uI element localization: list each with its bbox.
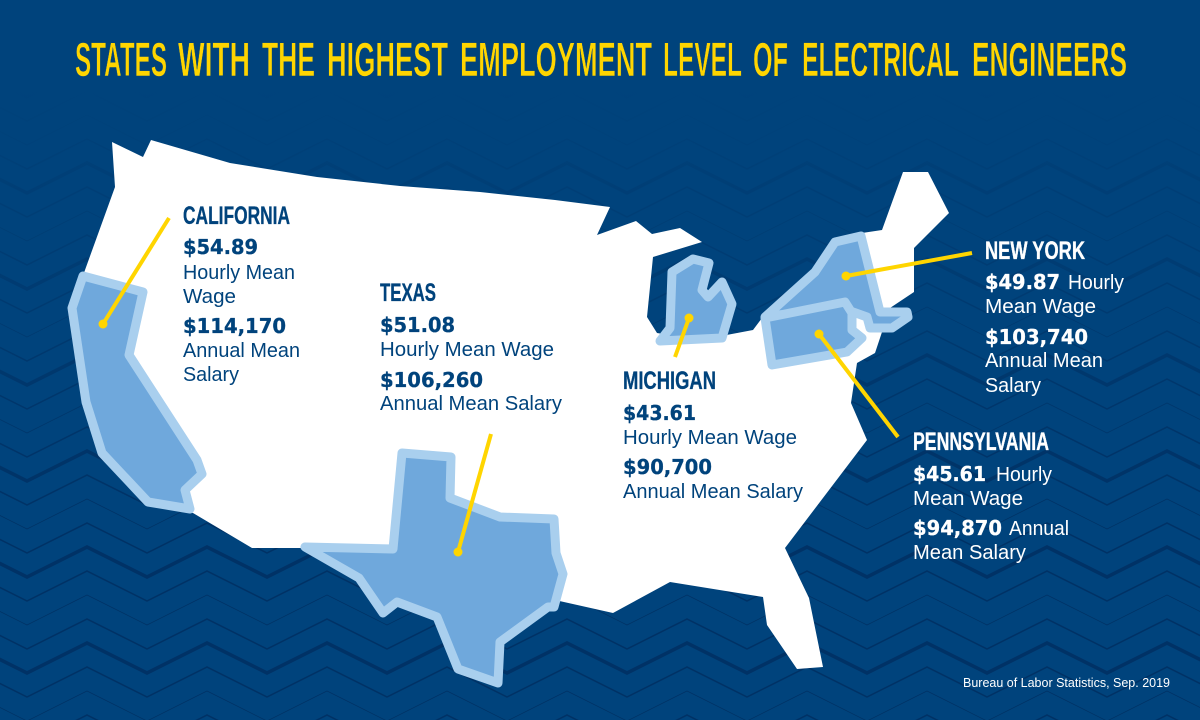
Pennsylvania text: Annual bbox=[1009, 518, 1069, 540]
panel: Texas bbox=[305, 279, 563, 683]
US map silhouette bbox=[72, 140, 949, 669]
title: THE bbox=[262, 34, 315, 87]
Texas text: Annual Mean Salary bbox=[380, 393, 562, 415]
title: ELECTRICAL bbox=[802, 34, 959, 87]
title: STATES bbox=[75, 34, 167, 87]
title: EMPLOYMENT bbox=[460, 34, 652, 87]
New York text: Annual Mean bbox=[985, 350, 1103, 372]
New York state shape bbox=[765, 236, 908, 328]
New York text: $49.87 bbox=[985, 270, 1060, 294]
Michigan leader line bbox=[675, 314, 694, 357]
source note: Bureau of Labor Statistics, Sep. 2019 bbox=[963, 675, 1170, 690]
panel: Michigan bbox=[623, 259, 803, 503]
New York leader line bbox=[842, 253, 972, 280]
panel: California bbox=[72, 202, 300, 509]
New York text: Salary bbox=[985, 375, 1041, 397]
California text: Hourly Mean bbox=[183, 262, 295, 284]
Pennsylvania text: Hourly bbox=[996, 464, 1052, 486]
New York text: $103,740 bbox=[985, 325, 1088, 349]
Texas text: $51.08 bbox=[380, 313, 455, 337]
California text: $114,170 bbox=[183, 314, 286, 338]
Michigan text: $43.61 bbox=[623, 401, 696, 425]
Michigan text: MICHIGAN bbox=[623, 367, 716, 395]
Pennsylvania text bbox=[913, 428, 1069, 564]
Pennsylvania text: PENNSYLVANIA bbox=[913, 428, 1049, 456]
New York text: Mean Wage bbox=[985, 296, 1096, 318]
New York text: Hourly bbox=[1068, 272, 1124, 294]
Michigan text: Annual Mean Salary bbox=[623, 481, 803, 503]
title: WITH bbox=[178, 34, 250, 87]
panel: New York bbox=[765, 236, 1124, 397]
title: LEVEL bbox=[663, 34, 742, 87]
Michigan text: Hourly Mean Wage bbox=[623, 427, 797, 449]
California text: Annual Mean bbox=[183, 340, 300, 362]
Pennsylvania text: Mean Wage bbox=[913, 488, 1023, 510]
Pennsylvania text: $94,870 bbox=[913, 516, 1002, 540]
title: OF bbox=[753, 34, 788, 87]
California state shape bbox=[72, 276, 202, 509]
California text: Salary bbox=[183, 364, 239, 386]
Texas text: TEXAS bbox=[380, 279, 436, 307]
Texas state shape bbox=[305, 453, 563, 683]
California text bbox=[183, 202, 300, 386]
Texas text: $106,260 bbox=[380, 368, 483, 392]
Pennsylvania text: $45.61 bbox=[913, 462, 986, 486]
Pennsylvania text: Mean Salary bbox=[913, 542, 1026, 564]
New York text bbox=[985, 237, 1124, 397]
California text: CALIFORNIA bbox=[183, 202, 290, 230]
panel: Pennsylvania bbox=[765, 302, 1069, 564]
Michigan text: $90,700 bbox=[623, 455, 712, 479]
California leader line bbox=[98, 218, 169, 328]
California text: Wage bbox=[183, 286, 236, 308]
title: HIGHEST bbox=[327, 34, 448, 87]
title bbox=[75, 34, 1127, 87]
Pennsylvania leader line bbox=[814, 330, 898, 437]
Michigan text bbox=[623, 367, 803, 503]
Texas text bbox=[380, 279, 562, 415]
California text: $54.89 bbox=[183, 235, 258, 259]
Texas text: Hourly Mean Wage bbox=[380, 339, 554, 361]
New York text: NEW YORK bbox=[985, 237, 1085, 265]
Texas leader line bbox=[454, 434, 491, 556]
Pennsylvania state shape bbox=[765, 302, 862, 365]
Michigan state shape bbox=[660, 259, 732, 341]
